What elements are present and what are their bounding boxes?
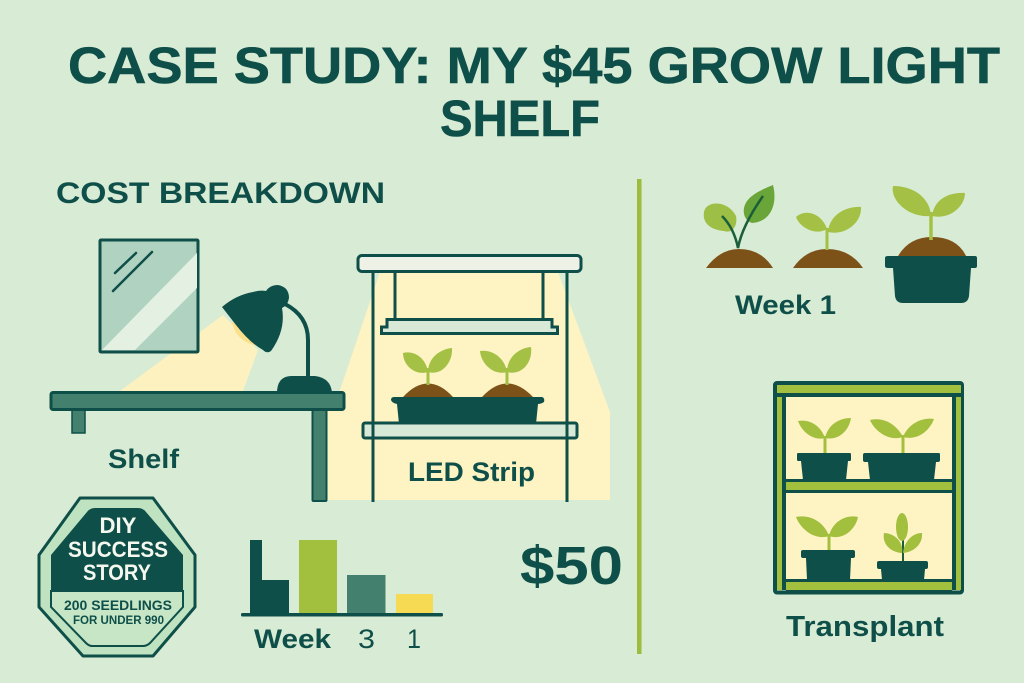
icon: seedling in soil, first	[704, 185, 774, 268]
bar chart: Week	[254, 624, 332, 654]
icon: shelf with potted seedlings	[775, 383, 962, 592]
icon: grow light rack with seedlings	[358, 256, 581, 502]
badge: DIY success story: FOR UNDER 990	[73, 613, 164, 627]
total price: $50	[520, 536, 623, 596]
lamp light beam	[120, 315, 258, 391]
badge: DIY success story: STORY	[83, 560, 151, 585]
title	[68, 37, 1000, 147]
label: LED strip: LED Strip	[408, 457, 535, 487]
bar chart: 3	[358, 624, 375, 654]
label: shelf: Shelf	[108, 444, 180, 474]
bar chart	[241, 540, 443, 654]
icon: seedling in soil, second	[793, 207, 863, 268]
title: SHELF	[440, 90, 600, 147]
divider	[637, 179, 642, 654]
badge: DIY success story: 200 SEEDLINGS	[64, 597, 172, 613]
plant: top left	[797, 418, 851, 480]
plant: top right	[863, 419, 940, 480]
panel: LED shelf light glow	[327, 272, 610, 500]
title: CASE STUDY: MY $45 GROW LIGHT	[68, 37, 1000, 94]
icon: desk shelf	[51, 392, 344, 501]
icon: desk lamp	[222, 285, 332, 393]
plant: bottom right	[877, 513, 928, 580]
heading: cost breakdown: COST BREAKDOWN	[56, 177, 385, 210]
badge: DIY success story	[39, 498, 195, 656]
icon: mirror	[100, 240, 198, 352]
badge: DIY success story: SUCCESS	[68, 537, 168, 562]
label: transplant: Transplant	[786, 611, 944, 643]
bar chart: 1	[407, 624, 421, 654]
icon: potted seedling	[885, 186, 977, 303]
label: week 1: Week 1	[735, 290, 836, 320]
badge: DIY success story: DIY	[100, 513, 137, 538]
plant: bottom left	[796, 516, 858, 580]
